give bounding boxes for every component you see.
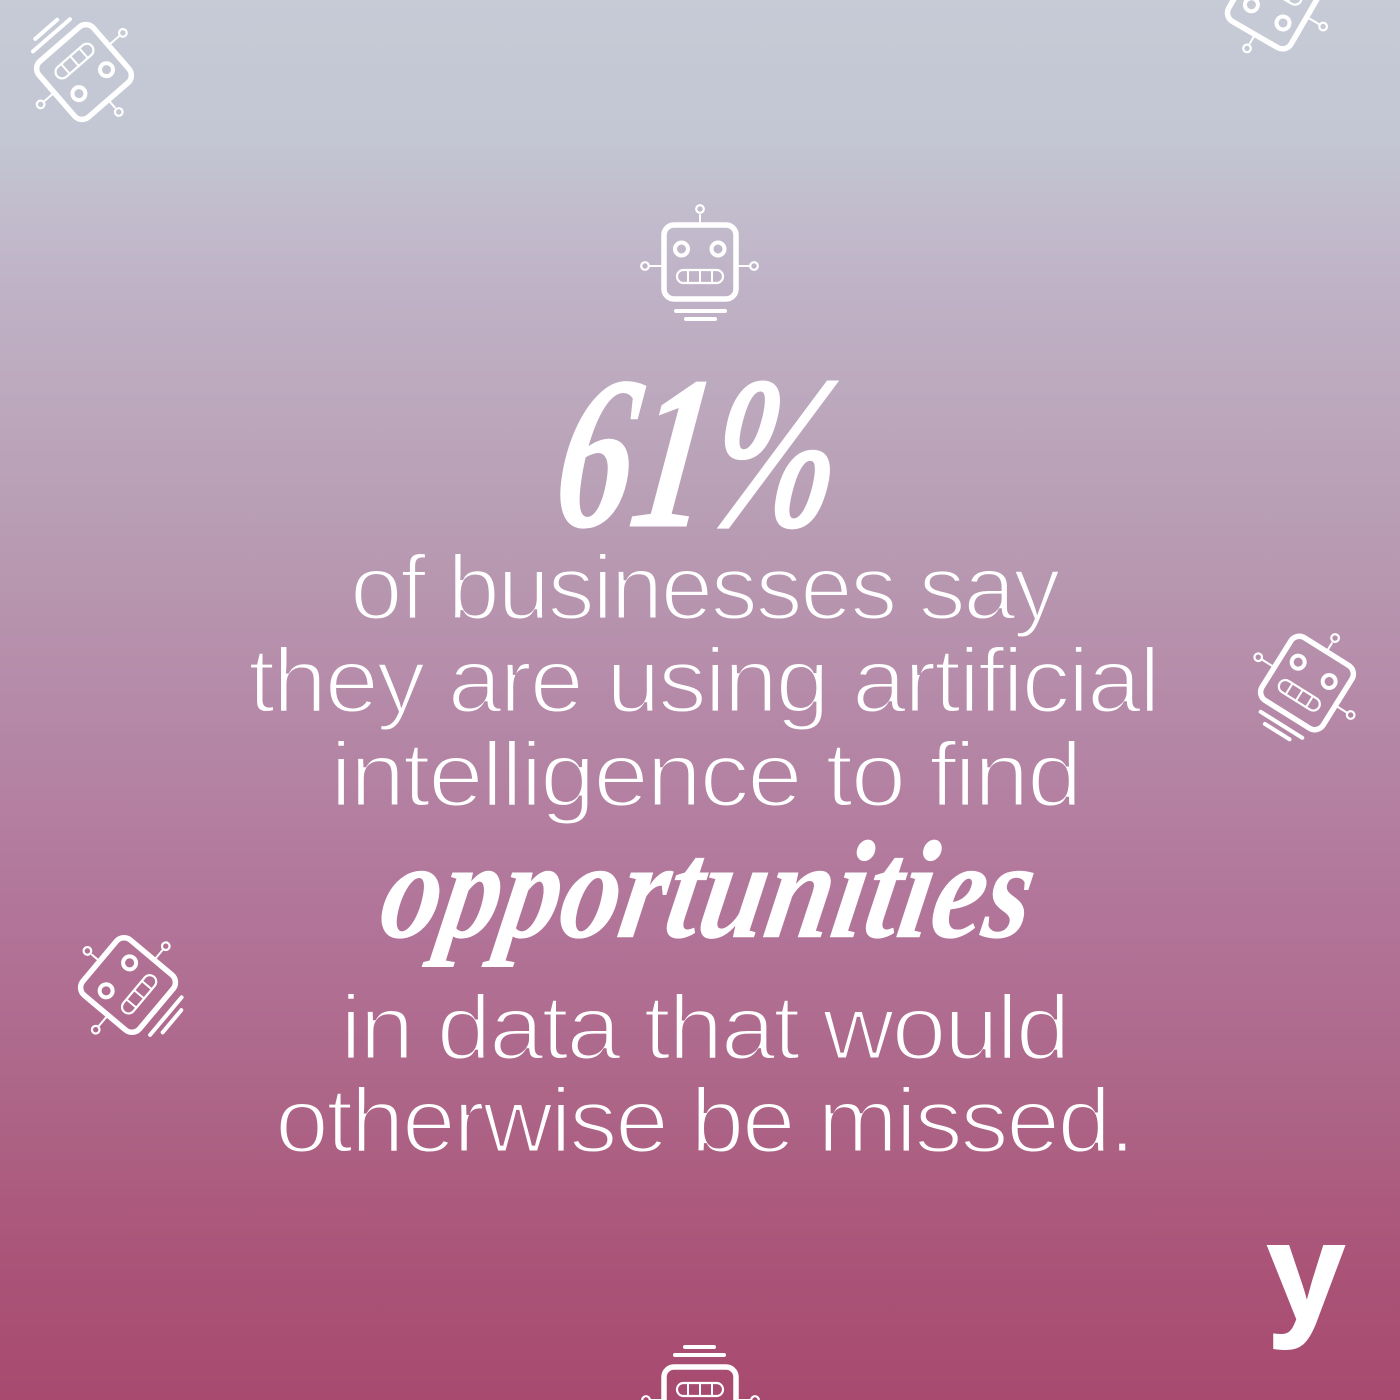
body text top: intelligence to find: [330, 724, 1080, 826]
body text bottom: in data that would: [340, 977, 1068, 1079]
logo: y: [1267, 1193, 1345, 1350]
headline statistic: 61%: [543, 333, 857, 574]
body text bottom: [275, 977, 1133, 1172]
icon: robot top left: [3, 0, 166, 153]
icon: robot bottom centre: [642, 1347, 759, 1400]
body text bottom: otherwise be missed.: [275, 1070, 1133, 1172]
body text top: of businesses say: [350, 537, 1061, 639]
highlighted word: opportunities: [371, 812, 1048, 968]
icon: robot top right: [1195, 0, 1353, 81]
icon: robot right: [1227, 604, 1386, 762]
icon: robot left: [47, 904, 209, 1067]
icon: robot top centre: [641, 205, 758, 319]
body text top: they are using artificial: [248, 630, 1158, 732]
body text top: [248, 537, 1158, 826]
